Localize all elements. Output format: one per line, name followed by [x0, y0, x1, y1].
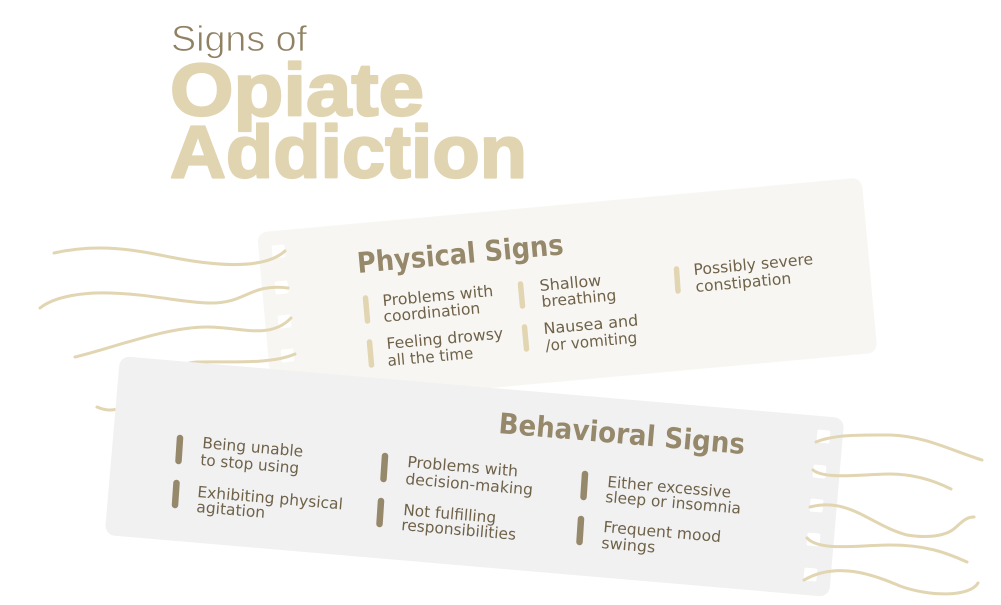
heading: Behavioral Signs: Behavioral Signs [497, 407, 746, 461]
item: problems with decision-making: Problems with [407, 453, 519, 480]
strings: physical panel [40, 248, 295, 410]
item: possibly severe constipation: Possibly severe [693, 250, 814, 279]
item: feeling drowsy all the time: Feeling drowsy [386, 324, 504, 353]
item: problems with decision-making [384, 453, 534, 499]
item: problems with coordination: Problems with [382, 282, 494, 310]
item: either excessive sleep or insomnia: sleep or insomnia [605, 488, 742, 518]
item: exhibiting physical agitation: agitation [196, 498, 266, 522]
item: nausea and/or vomiting [524, 311, 639, 355]
item: problems with coordination: coordination [383, 299, 481, 326]
item: problems with decision-making: decision-making [405, 470, 534, 499]
item: not fulfilling responsibilities [380, 501, 517, 544]
title line: Addiction: Addiction [170, 110, 527, 194]
item: possibly severe constipation: constipation [695, 269, 792, 296]
panel: behavioral signs [105, 356, 982, 597]
item: shallow breathing: Shallow [539, 271, 602, 295]
panel background [105, 356, 844, 597]
panel background [257, 177, 877, 408]
item: shallow breathing: breathing [541, 286, 617, 311]
panel perforations [803, 430, 830, 582]
item: exhibiting physical agitation [175, 483, 344, 522]
panel: physical signs [40, 177, 877, 410]
title [170, 18, 527, 194]
item: frequent mood swings [580, 518, 722, 557]
title line: Signs of: Signs of [171, 18, 308, 59]
heading: Physical Signs: Physical Signs [356, 228, 565, 280]
strings: behavioral panel [804, 435, 982, 594]
item: feeling drowsy all the time: all the time [387, 344, 474, 370]
item: shallow breathing [520, 271, 617, 311]
item: nausea and/or vomiting: Nausea and [543, 311, 639, 338]
item: either excessive sleep or insomnia: Either excessive [607, 473, 732, 502]
item: problems with coordination [366, 282, 494, 326]
item: being unable to stop using: Being unable [202, 434, 304, 461]
item: not fulfilling responsibilities: responsibilities [401, 516, 517, 544]
item: being unable to stop using [178, 434, 304, 477]
item: possibly severe constipation [676, 250, 814, 296]
item: frequent mood swings: Frequent mood [603, 518, 722, 546]
title line: Opiate: Opiate [170, 48, 424, 132]
item: being unable to stop using: to stop using [200, 451, 300, 477]
item: frequent mood swings: swings [601, 534, 656, 557]
item: feeling drowsy all the time [370, 324, 504, 370]
item: exhibiting physical agitation: Exhibiting physical [197, 483, 344, 513]
item: nausea and/or vomiting: /or vomiting [545, 329, 638, 355]
item: not fulfilling responsibilities: Not fulfilling [403, 501, 497, 527]
item: either excessive sleep or insomnia [584, 473, 742, 518]
panel perforations [271, 244, 295, 363]
